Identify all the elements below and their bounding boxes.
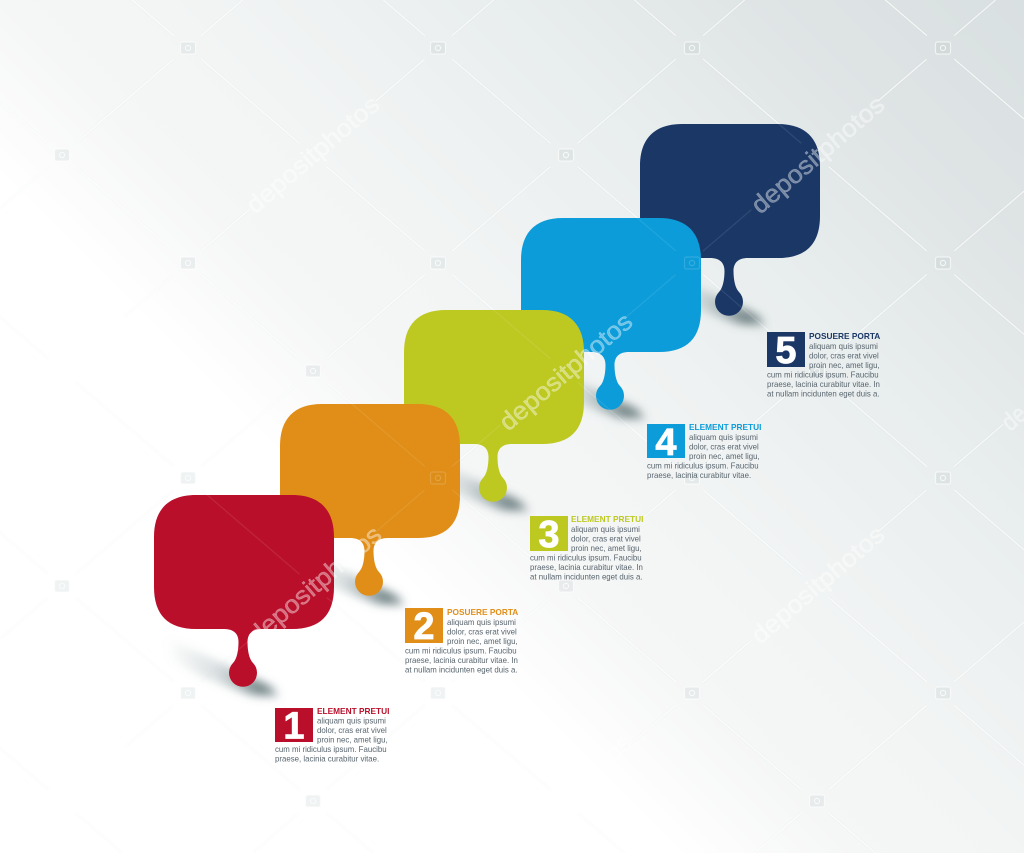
body 1: cum mi ridiculus ipsum. Faucibu xyxy=(275,745,387,754)
step 5 text block xyxy=(767,330,880,398)
body 3: cum mi ridiculus ipsum. Faucibu xyxy=(530,554,642,562)
body 2: aliquam quis ipsumi xyxy=(447,618,516,627)
watermarks: depositphotos xyxy=(746,520,890,650)
body 5: dolor, cras erat vivel xyxy=(809,352,879,360)
body 4 xyxy=(647,433,760,480)
watermarks: depositphotos xyxy=(494,307,638,437)
body 1 xyxy=(275,716,388,764)
body 5: at nullam incidunten eget duis a. xyxy=(767,390,880,398)
body 3: praese, lacinia curabitur vitae. In xyxy=(530,563,643,572)
body 2: at nullam incidunten eget duis a. xyxy=(405,666,518,674)
watermarks: depositphotos xyxy=(243,520,387,650)
watermarks: depositphotos xyxy=(746,90,890,220)
body 4: cum mi ridiculus ipsum. Faucibu xyxy=(647,462,759,470)
body 4: proin nec, amet ligu, xyxy=(689,452,760,461)
heading 3: ELEMENT PRETUI xyxy=(571,514,643,524)
step 1 text block xyxy=(275,706,389,764)
bubble 4: blue xyxy=(521,218,701,410)
bubble 5: navy xyxy=(640,124,820,316)
body 1: praese, lacinia curabitur vitae. xyxy=(275,754,379,764)
heading 2: POSUERE PORTA xyxy=(447,607,518,617)
number badge 4: 4 xyxy=(655,422,677,464)
body 2 xyxy=(405,618,518,674)
watermarks: depositphotos xyxy=(497,729,637,853)
number badge 5: 5 xyxy=(775,330,797,372)
number badge 2: 2 xyxy=(413,606,435,648)
body 3: aliquam quis ipsumi xyxy=(571,525,640,534)
body 3: dolor, cras erat vivel xyxy=(571,534,641,544)
body 5: praese, lacinia curabitur vitae. In xyxy=(767,380,880,389)
body 3 xyxy=(530,525,643,582)
body 2: praese, lacinia curabitur vitae. In xyxy=(405,656,518,665)
body 1: dolor, cras erat vivel xyxy=(317,726,387,735)
body 3: at nullam incidunten eget duis a. xyxy=(530,572,643,582)
bubble 3: lime xyxy=(404,310,584,502)
step 4 text block xyxy=(647,422,761,480)
body 2: proin nec, amet ligu, xyxy=(447,637,518,646)
body 3: proin nec, amet ligu, xyxy=(571,544,642,553)
bubble shadows xyxy=(165,266,766,697)
body 2: dolor, cras erat vivel xyxy=(447,628,517,636)
body 5: cum mi ridiculus ipsum. Faucibu xyxy=(767,370,879,380)
body 5 xyxy=(767,342,880,398)
heading 5: POSUERE PORTA xyxy=(809,331,880,341)
bubble 2: orange xyxy=(280,404,460,596)
body 5: aliquam quis ipsumi xyxy=(809,342,878,351)
step 3 text block xyxy=(530,514,643,582)
bubble 1: red xyxy=(154,495,334,687)
body 2: cum mi ridiculus ipsum. Faucibu xyxy=(405,646,517,656)
body 5: proin nec, amet ligu, xyxy=(809,361,880,370)
body 1: proin nec, amet ligu, xyxy=(317,736,388,744)
camera icons xyxy=(54,42,950,807)
heading 1: ELEMENT PRETUI xyxy=(317,706,389,716)
heading 4: ELEMENT PRETUI xyxy=(689,422,761,432)
step 2 text block xyxy=(405,606,518,674)
body 4: praese, lacinia curabitur vitae. xyxy=(647,471,751,480)
body 4: dolor, cras erat vivel xyxy=(689,442,759,452)
body 1: aliquam quis ipsumi xyxy=(317,716,386,726)
number badge 3: 3 xyxy=(538,514,560,556)
body 4: aliquam quis ipsumi xyxy=(689,433,758,442)
number badge 1: 1 xyxy=(283,706,305,748)
watermarks: depositphotos xyxy=(241,90,385,220)
